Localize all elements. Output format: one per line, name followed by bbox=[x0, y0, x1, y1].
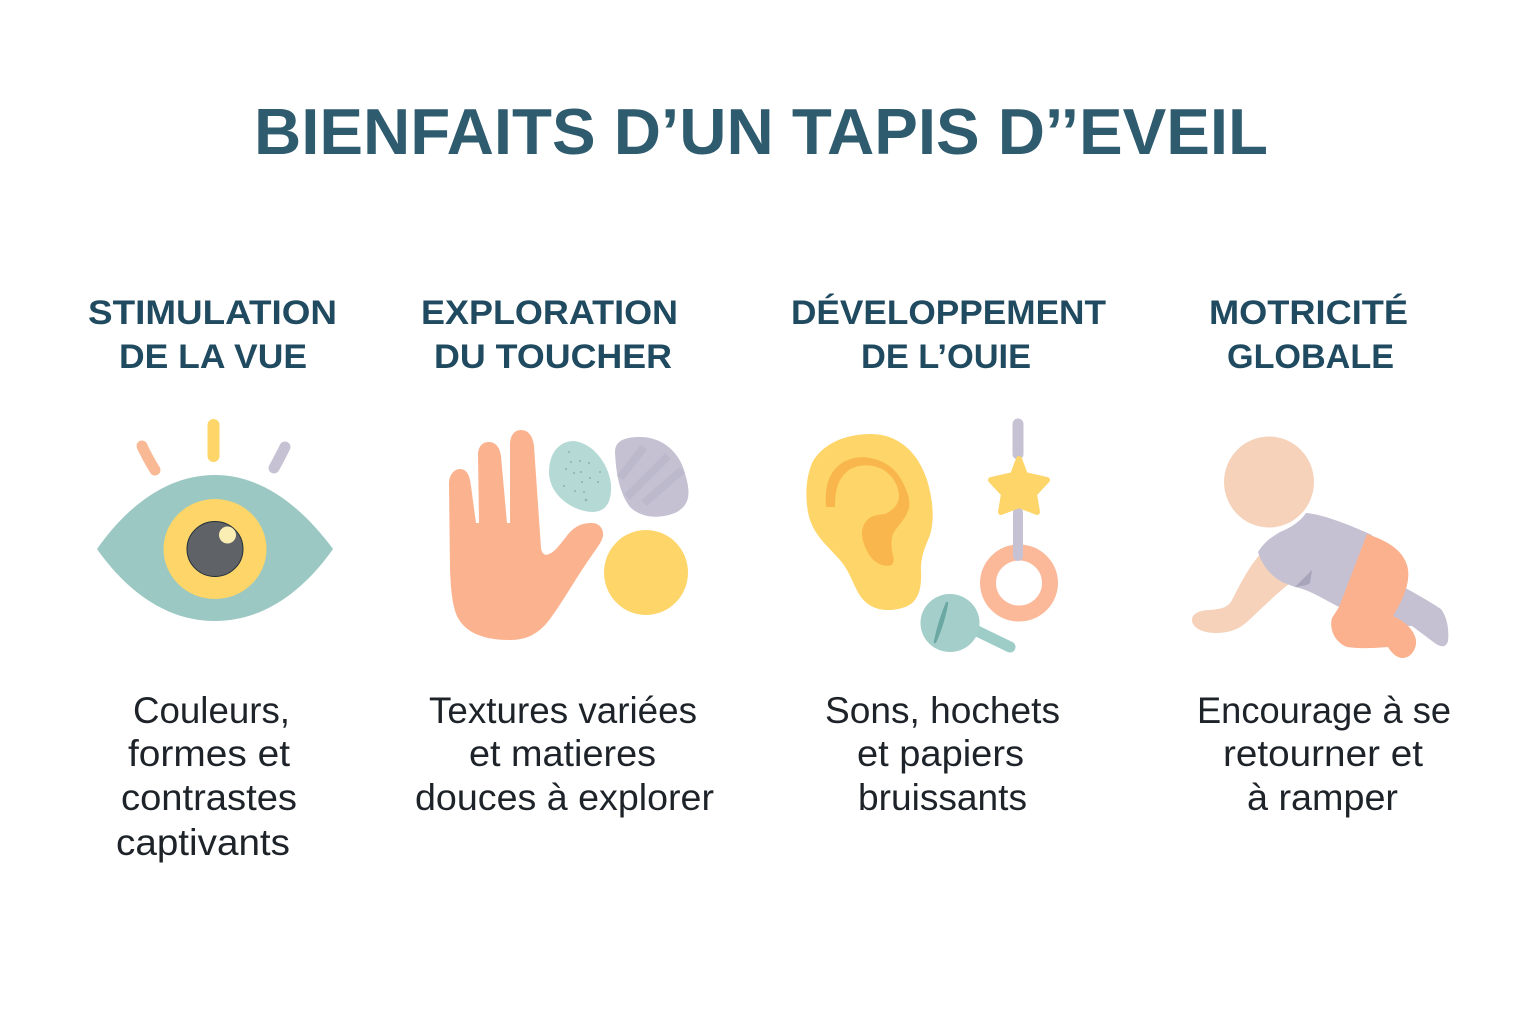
heading: stimulation de la vue bbox=[88, 294, 337, 376]
icon: crawling baby bbox=[1192, 436, 1448, 658]
text block: toucher description: Textures variées bbox=[429, 690, 697, 731]
heading: développement de l'ouïe bbox=[791, 294, 1106, 376]
text block: vue description: formes et bbox=[128, 733, 291, 774]
text block: vue description bbox=[116, 690, 297, 863]
heading: stimulation de la vue: DE LA VUE bbox=[119, 338, 307, 376]
heading: motricité globale bbox=[1209, 294, 1408, 376]
text block: ouïe description: et papiers bbox=[857, 733, 1024, 774]
heading: exploration du toucher: DU TOUCHER bbox=[434, 338, 672, 376]
heading: motricité globale: MOTRICITÉ bbox=[1209, 294, 1408, 332]
text block: vue description: Couleurs, bbox=[133, 690, 290, 731]
text block: toucher description: et matieres bbox=[469, 733, 656, 774]
text block: ouïe description: bruissants bbox=[858, 777, 1027, 818]
text block: vue description: contrastes bbox=[121, 777, 297, 818]
icon: ear, mobile toy and rattle bbox=[806, 424, 1050, 652]
text block: motricité description: retourner et bbox=[1223, 733, 1424, 774]
heading: exploration du toucher: EXPLORATION bbox=[421, 294, 678, 332]
panel: motricité globale bbox=[1192, 294, 1451, 818]
heading: stimulation de la vue: STIMULATION bbox=[88, 294, 337, 332]
text block: motricité description: Encourage à se bbox=[1197, 690, 1451, 731]
text block: vue description: captivants bbox=[116, 822, 290, 863]
heading: développement de l'ouïe: DÉVELOPPEMENT bbox=[791, 294, 1106, 332]
panel: stimulation de la vue bbox=[88, 294, 337, 863]
title: BIENFAITS D’UN TAPIS D’’EVEIL bbox=[254, 95, 1268, 168]
text block: motricité description: à ramper bbox=[1247, 777, 1398, 818]
text block: toucher description bbox=[415, 690, 714, 818]
text block: toucher description: douces à explorer bbox=[415, 777, 714, 818]
icon: hand and textures bbox=[449, 430, 688, 640]
icon: eye with rays bbox=[97, 425, 333, 621]
heading: exploration du toucher bbox=[421, 294, 678, 376]
text block: motricité description bbox=[1197, 690, 1451, 818]
text block: ouïe description bbox=[825, 690, 1060, 818]
panel: développement de l'ouïe bbox=[791, 294, 1106, 818]
text block: ouïe description: Sons, hochets bbox=[825, 690, 1060, 731]
heading: motricité globale: GLOBALE bbox=[1227, 338, 1394, 376]
heading: développement de l'ouïe: DE L’OUIE bbox=[861, 338, 1031, 376]
panel: exploration du toucher bbox=[415, 294, 714, 818]
